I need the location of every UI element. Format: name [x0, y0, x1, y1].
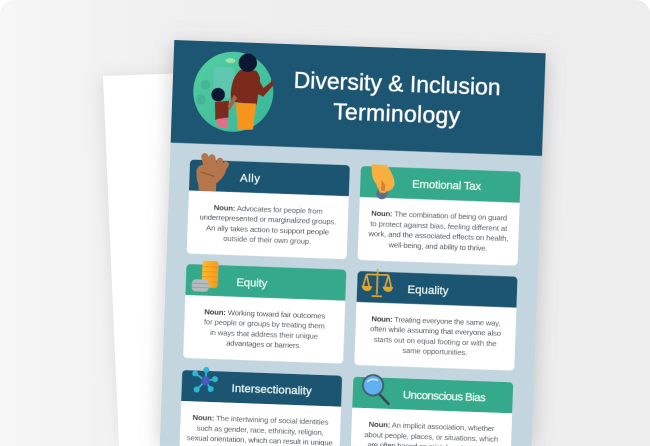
title: Diversity & Inclusion — [293, 67, 501, 100]
card header — [352, 377, 513, 413]
definition text: well-being, and ability to thrive. — [387, 240, 488, 253]
panel: Ally — [187, 152, 350, 259]
card title: Emotional Tax — [412, 179, 482, 193]
card white body — [354, 302, 516, 371]
card header — [181, 370, 342, 407]
definition text: underrepresented or marginalized groups. — [199, 213, 337, 227]
definition text: Noun: Advocates for people from — [214, 203, 323, 216]
definition text: Noun: An implicit association, whether — [369, 420, 495, 433]
panel: Equality — [354, 268, 518, 371]
card white body — [187, 191, 349, 259]
definition text: to protect against bias, feeling different at — [370, 219, 508, 233]
definition text: An ally takes action to support people — [206, 223, 329, 237]
poster — [157, 40, 549, 446]
definition text: work, and the associated effects on health, — [367, 229, 509, 243]
definition text: starts out on equal footing or with the — [374, 335, 497, 348]
poster body — [160, 142, 542, 446]
definition text: such as gender, race, ethnicity, religion, — [197, 423, 324, 437]
title — [292, 67, 501, 130]
definition text: Noun: Working toward fair outcomes — [204, 307, 326, 320]
icon: parent and child illustration — [192, 50, 275, 133]
card white body — [183, 295, 345, 364]
icon: magnifying glass — [362, 375, 389, 404]
definition text: in ways that address their unique — [210, 328, 318, 341]
card header — [189, 160, 350, 196]
definition text — [364, 420, 499, 446]
icon: network nodes — [192, 366, 218, 393]
definition text — [368, 210, 508, 252]
card white body — [180, 401, 341, 446]
panel: Equity — [183, 260, 347, 364]
poster shadow — [157, 42, 549, 446]
icon: hand pressing coin — [371, 164, 395, 200]
definition text: Noun: The intertwining of social identities — [192, 413, 329, 427]
definition text: often while assuming that everyone also — [370, 324, 501, 338]
definition text: advantages or barriers. — [226, 339, 301, 350]
card title: Equity — [236, 277, 268, 290]
card white body — [358, 197, 520, 266]
definition text — [204, 309, 325, 348]
card white body — [351, 408, 512, 446]
card header — [185, 264, 346, 301]
panel: Unconscious Bias — [351, 374, 513, 446]
card header — [357, 271, 518, 308]
panel: Emotional Tax — [358, 164, 521, 266]
definition text — [370, 316, 501, 356]
definition text — [187, 413, 334, 446]
card header — [360, 166, 521, 203]
title: Terminology — [333, 98, 461, 129]
white back sheet — [98, 72, 173, 446]
definition text: Noun: The combination of being on guard — [371, 209, 507, 223]
definition text: Noun: Treating everyone the same way, — [371, 314, 501, 328]
card title: Intersectionality — [231, 383, 312, 398]
definition text — [200, 205, 336, 246]
definition text: outside of their own group. — [223, 234, 311, 246]
card title: Unconscious Bias — [403, 389, 486, 404]
definition text: same opportunities. — [402, 346, 467, 357]
header band — [171, 40, 546, 156]
panel: Intersectionality — [180, 366, 342, 446]
icon: balance scale — [362, 268, 393, 297]
definition text: for people or groups by treating them — [204, 317, 325, 331]
card title: Ally — [240, 172, 260, 185]
card title: Equality — [407, 284, 449, 297]
icon: coin stacks — [192, 260, 219, 292]
icon: raised fist — [196, 152, 230, 192]
definition text: about people, places, or situations, which — [364, 430, 498, 444]
